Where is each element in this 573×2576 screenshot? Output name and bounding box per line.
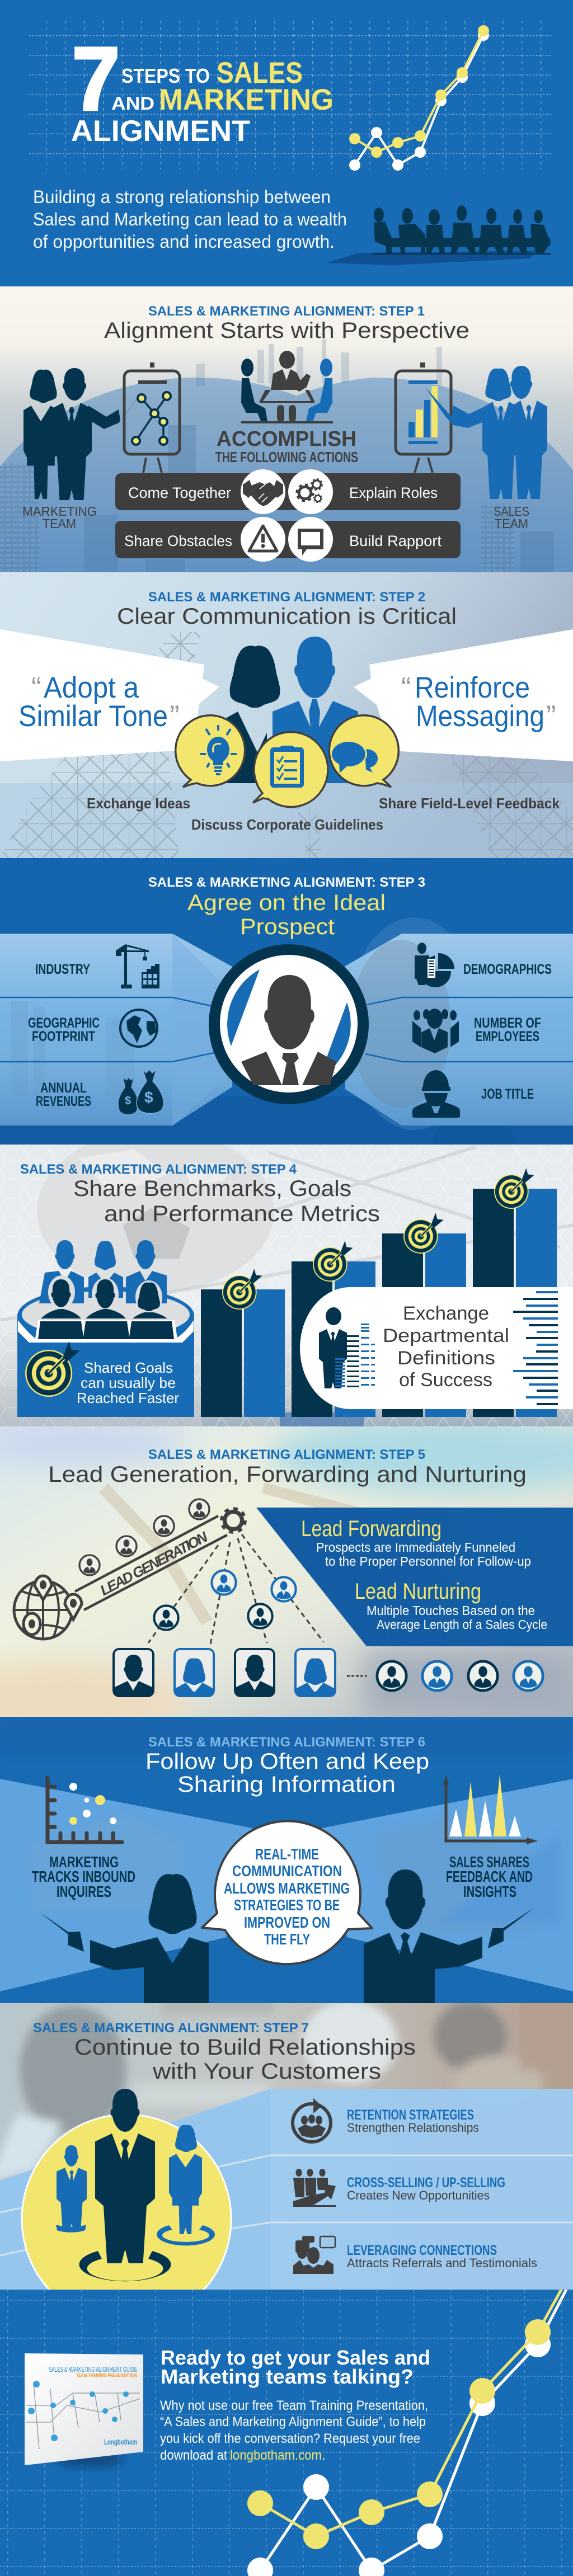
title: ALIGNMENT xyxy=(71,115,250,148)
speech bubble: lightbulb xyxy=(176,715,245,787)
icon: target xyxy=(25,1341,80,1397)
title: SALES xyxy=(217,56,303,90)
intro text xyxy=(33,187,347,252)
text: sales shares feedback and insights: INSIGHTS xyxy=(463,1883,516,1900)
heading: Alignment Starts with Perspective xyxy=(104,318,469,343)
panel: step 1 alignment starts with perspective xyxy=(0,286,573,572)
callout: real-time communication bubble: IMPROVED ON xyxy=(244,1914,330,1931)
text: sales shares feedback and insights: FEEDBACK AND xyxy=(446,1868,533,1885)
text: lead forwarding xyxy=(301,1517,531,1569)
item: retention strategies: RETENTION STRATEGIES xyxy=(347,2107,474,2123)
callout: real-time communication bubble: THE FLY xyxy=(264,1930,310,1948)
quote wedge: reinforce messaging: “ xyxy=(401,671,411,704)
quote wedge: adopt a similar tone: Similar Tone xyxy=(18,700,168,733)
lead generation funnel band: LEAD GENERATION xyxy=(97,1528,211,1599)
intro text: Sales and Marketing can lead to a wealth xyxy=(33,209,347,229)
section label: SALES & MARKETING ALIGNMENT: STEP 6 xyxy=(148,1735,425,1750)
icon: warning triangle xyxy=(249,526,277,551)
ring: center figure xyxy=(79,2251,171,2281)
text: accomplish the following actions: ACCOMPLISH xyxy=(217,427,356,451)
icons: forwarded lead nodes xyxy=(154,1570,296,1630)
text: annual revenues xyxy=(36,1080,91,1109)
nurtured leads row xyxy=(347,1661,543,1690)
action bar: come together and explain roles: Come Together xyxy=(128,484,231,501)
icon: easel with bar chart xyxy=(396,362,451,473)
text: invitation paragraph: download at xyxy=(160,2448,227,2463)
text: exchange departmental definitions: Definitions xyxy=(397,1348,495,1369)
text: lead forwarding: Prospects are Immediately Funneled xyxy=(316,1540,515,1555)
item: cross-selling up-selling: Creates New Opportunities xyxy=(347,2188,490,2202)
section label: SALES & MARKETING ALIGNMENT: STEP 5 xyxy=(148,1447,425,1462)
callout: real-time communication bubble: REAL-TIME xyxy=(255,1845,319,1863)
heading: with Your Customers xyxy=(152,2059,381,2084)
quote wedge: reinforce messaging: Messaging xyxy=(416,700,544,733)
text: ready to get talking xyxy=(161,2346,430,2388)
item: cross-selling up-selling xyxy=(293,2169,505,2207)
icon: presenter with pie chart xyxy=(415,943,454,987)
icon: money bags xyxy=(119,1070,163,1114)
icon: person with bars xyxy=(319,1307,375,1388)
section label: SALES & MARKETING ALIGNMENT: STEP 7 xyxy=(33,2021,309,2036)
item: retention strategies: Strengthen Relationships xyxy=(347,2121,479,2135)
icon: money bags: $ xyxy=(125,1095,131,1107)
meeting silhouette xyxy=(326,205,551,265)
quote wedge: reinforce messaging xyxy=(354,629,573,761)
quote wedge: adopt a similar tone xyxy=(0,629,219,761)
text: exchange departmental definitions: of Success xyxy=(399,1369,492,1391)
tower imagery xyxy=(0,632,573,858)
icon: gear xyxy=(222,1509,245,1532)
icon: prospect portrait circle xyxy=(209,944,369,1104)
line chart: rising trend xyxy=(247,2290,566,2576)
title: AND xyxy=(111,93,154,114)
heading: Prospect xyxy=(240,915,335,939)
action bar: share obstacles and build rapport xyxy=(115,517,461,562)
panel: step 3 ideal prospect xyxy=(0,858,573,1145)
heading: Continue to Build Relationships xyxy=(74,2035,416,2060)
text: shared goals: can usually be xyxy=(81,1374,176,1391)
label: sales team: SALES xyxy=(494,504,529,519)
scatter chart xyxy=(48,1778,122,1842)
heading xyxy=(187,891,386,939)
icon: crane and building xyxy=(116,944,159,988)
action bar: share obstacles and build rapport: Build Rapport xyxy=(349,533,442,549)
text: shared goals xyxy=(77,1359,179,1406)
icon: globe xyxy=(120,1010,157,1047)
quote wedge: adopt a similar tone: Adopt a xyxy=(44,671,139,704)
lead generation funnel band xyxy=(75,1516,227,1610)
heading: and Performance Metrics xyxy=(104,1202,380,1226)
item: leveraging connections: Attracts Referrals and Testimonials xyxy=(347,2256,537,2270)
quote wedge: adopt a similar tone: “ xyxy=(31,671,41,704)
icon: man presenter xyxy=(364,1869,534,2003)
panel: shared goals team table xyxy=(17,1240,194,1417)
callout: real-time communication bubble: ALLOWS MARKETING xyxy=(224,1880,350,1897)
labels: discussion topics: Exchange Ideas xyxy=(87,795,190,812)
guide cover: Longbotham xyxy=(104,2437,137,2446)
action bar: come together and explain roles: Explain Roles xyxy=(349,484,438,501)
panel: step 6 follow up often xyxy=(0,1717,573,2003)
text: exchange departmental definitions: Departmental xyxy=(383,1325,509,1346)
section label: SALES & MARKETING ALIGNMENT: STEP 2 xyxy=(148,590,425,605)
text: number of employees: EMPLOYEES xyxy=(476,1029,539,1044)
icon: team group xyxy=(412,1009,459,1053)
text: annual revenues: REVENUES xyxy=(36,1094,91,1109)
item: cross-selling up-selling: CROSS-SELLING / UP-SELLING xyxy=(347,2175,505,2191)
heading xyxy=(145,1749,429,1797)
text: invitation paragraph: Why not use our free Team Training Presentation, xyxy=(160,2398,428,2413)
labels: discussion topics xyxy=(87,795,560,833)
text: sales shares feedback and insights xyxy=(446,1853,533,1900)
text: lead nurturing: Multiple Touches Based on the xyxy=(367,1603,535,1618)
speech bubble: chat xyxy=(329,715,398,787)
icon: woman presenter xyxy=(39,1874,209,2003)
section label: SALES & MARKETING ALIGNMENT: STEP 3 xyxy=(148,875,425,890)
title xyxy=(71,29,334,148)
heading: Clear Communication is Critical xyxy=(117,604,457,629)
label: sales team xyxy=(494,507,529,528)
icon: leaders on yellow circle xyxy=(22,2089,231,2324)
callout: real-time communication bubble: COMMUNICATION xyxy=(232,1862,342,1880)
panel: left attributes xyxy=(0,934,241,1125)
text: accomplish the following actions: THE FOLLOWING ACTIONS xyxy=(215,449,358,465)
title: 7 xyxy=(72,29,120,129)
icon: easel with network diagram xyxy=(124,362,180,473)
text: invitation paragraph: . xyxy=(322,2448,326,2463)
callout: departmental definitions xyxy=(300,1287,573,1409)
quote wedge: reinforce messaging: Reinforce xyxy=(415,671,530,704)
label: marketing team xyxy=(24,507,96,528)
icon: meeting table with three people xyxy=(241,351,333,423)
text: geographic footprint: FOOTPRINT xyxy=(32,1029,95,1044)
text: lead forwarding: to the Proper Personnel for Follow-up xyxy=(325,1554,531,1569)
text: exchange departmental definitions: Exchange xyxy=(403,1303,489,1324)
text: geographic footprint xyxy=(28,1015,100,1044)
text: number of employees: NUMBER OF xyxy=(474,1015,541,1031)
soccer ball and net imagery xyxy=(0,1130,573,1426)
text: lead forwarding: Lead Forwarding xyxy=(301,1517,442,1541)
icon: worker with hard hat xyxy=(412,1070,460,1118)
heading: Share Benchmarks, Goals xyxy=(73,1176,351,1201)
section label: SALES & MARKETING ALIGNMENT: STEP 1 xyxy=(148,304,425,319)
panel: call to action footer xyxy=(0,2290,573,2576)
text: marketing tracks inbound inquires: MARKETING xyxy=(49,1853,119,1871)
item: retention strategies xyxy=(293,2098,479,2142)
text: accomplish the following actions xyxy=(215,431,358,462)
panel: step 5 lead generation xyxy=(0,1415,573,1740)
text: invitation paragraph: “A Sales and Marketing Alignment Guide”, to help xyxy=(160,2414,426,2429)
icon: money bags: $ xyxy=(144,1089,153,1106)
text: invitation paragraph: you kick off the conversation? Request your free xyxy=(160,2431,420,2446)
quote wedge: reinforce messaging: ” xyxy=(546,700,556,733)
labels: discussion topics: Share Field-Level Feedback xyxy=(379,795,560,812)
icon: marketing team figures xyxy=(24,368,144,500)
text: lead nurturing: Lead Nurturing xyxy=(355,1579,481,1604)
title: STEPS TO xyxy=(121,64,210,87)
label: marketing team: MARKETING xyxy=(22,504,97,519)
text: job title: JOB TITLE xyxy=(481,1086,534,1102)
icon: handshake xyxy=(243,480,283,506)
text: ready to get talking: Ready to get your Sales and xyxy=(161,2346,430,2369)
action bar: share obstacles and build rapport: Share Obstacles xyxy=(124,533,232,549)
icon: gears xyxy=(297,479,322,502)
line chart: rising white and yellow trend xyxy=(349,25,489,171)
dashed forwarding lines xyxy=(148,1534,323,1645)
heading xyxy=(74,2035,416,2084)
icon: sales team figures xyxy=(425,366,547,499)
guide cover: SALES & MARKETING ALIGNMENT GUIDE xyxy=(49,2365,137,2374)
heading: Sharing Information xyxy=(177,1772,396,1797)
text: marketing tracks inbound inquires: TRACKS INBOUND xyxy=(32,1868,135,1885)
guide cover: TEAM TRAINING PRESENTATION xyxy=(76,2372,137,2378)
panel: hero header xyxy=(0,0,573,286)
decorative data ticks xyxy=(513,1291,558,1405)
text: industry: INDUSTRY xyxy=(35,962,90,977)
heading xyxy=(73,1176,380,1226)
icon: globe with location pins xyxy=(14,1576,82,1639)
text: shared goals: Reached Faster xyxy=(77,1390,179,1406)
section label: SALES & MARKETING ALIGNMENT: STEP 4 xyxy=(20,1162,297,1177)
text: marketing tracks inbound inquires xyxy=(32,1853,135,1900)
cards: sales personnel xyxy=(112,1648,336,1697)
heading: Agree on the Ideal xyxy=(187,891,386,915)
text: marketing tracks inbound inquires: INQUIRES xyxy=(57,1883,111,1900)
callout: real-time communication bubble xyxy=(202,1821,372,1964)
icon: speech bubble xyxy=(298,529,323,555)
speech bubble: checklist xyxy=(253,732,328,807)
text: number of employees xyxy=(474,1015,541,1044)
text: annual revenues: ANNUAL xyxy=(40,1080,87,1096)
icons: generated leads xyxy=(79,1499,209,1575)
guide cover xyxy=(25,2353,143,2467)
title: MARKETING xyxy=(159,83,334,116)
text: ready to get talking: Marketing teams talking? xyxy=(161,2365,414,2388)
panel: step 7 build relationships xyxy=(0,1997,573,2324)
intro text: of opportunities and increased growth. xyxy=(33,232,335,252)
icon: woman and man silhouettes xyxy=(218,637,358,783)
text: lead nurturing: Average Length of a Sales Cycle xyxy=(377,1617,547,1632)
spike chart xyxy=(443,1774,538,1844)
label: marketing team: TEAM xyxy=(43,516,76,531)
labels: discussion topics: Discuss Corporate Guidelines xyxy=(191,816,383,833)
quote wedge: adopt a similar tone: ” xyxy=(170,700,180,733)
heading: Lead Generation, Forwarding and Nurturing xyxy=(48,1462,527,1487)
panel: light blue wedge and items xyxy=(0,2089,573,2290)
text: sales shares feedback and insights: SALES SHARES xyxy=(449,1853,529,1871)
heading: Follow Up Often and Keep xyxy=(145,1749,429,1774)
action bar: come together and explain roles xyxy=(115,469,461,514)
panel: step 2 clear communication xyxy=(0,572,573,858)
callout: real-time communication bubble: STRATEGIES TO BE xyxy=(234,1896,340,1914)
panel: step 4 benchmarks and goals xyxy=(0,1130,573,1426)
bar chart with targets xyxy=(201,1168,557,1417)
text: shared goals: Shared Goals xyxy=(84,1359,173,1376)
text: invitation paragraph: longbotham.com xyxy=(230,2448,322,2463)
panel: right attributes xyxy=(345,934,573,1125)
intro text: Building a strong relationship between xyxy=(33,187,331,207)
item: leveraging connections: LEVERAGING CONNECTIONS xyxy=(347,2243,497,2258)
text: lead nurturing xyxy=(355,1579,547,1632)
label: sales team: TEAM xyxy=(495,516,528,531)
text: invitation paragraph xyxy=(160,2398,428,2463)
text: exchange departmental definitions xyxy=(383,1303,509,1391)
item: leveraging connections xyxy=(293,2236,537,2274)
text: geographic footprint: GEOGRAPHIC xyxy=(28,1015,100,1031)
panel: lead forwarding and nurturing xyxy=(256,1508,573,1646)
